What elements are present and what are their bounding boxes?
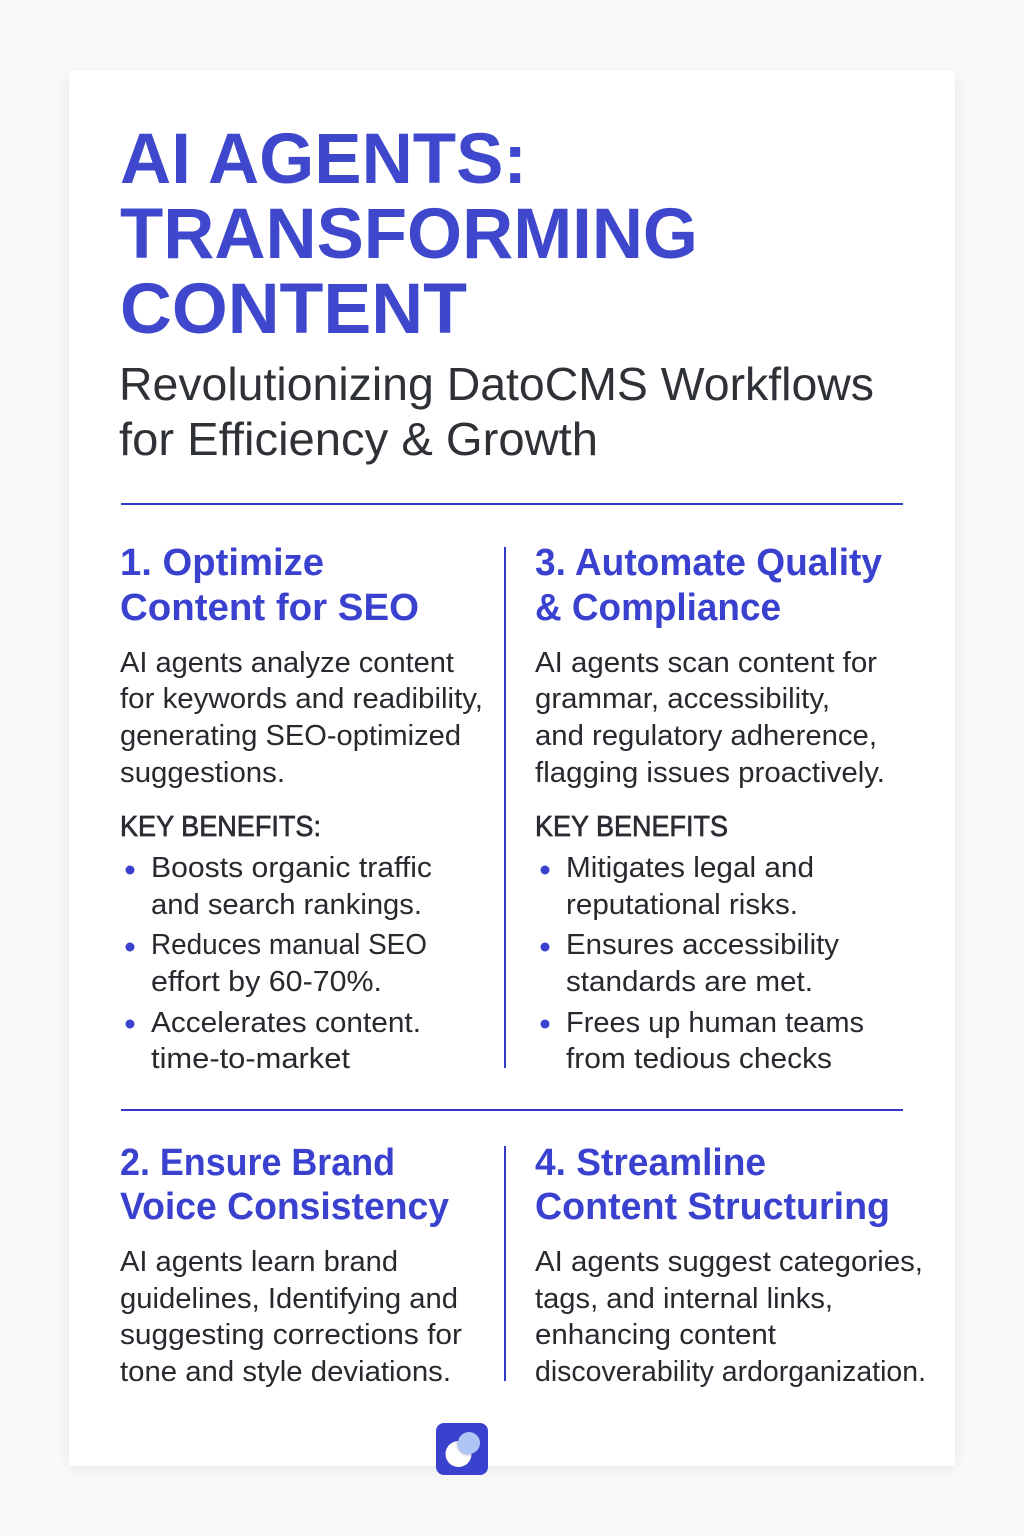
list: section 1 benefits (126, 852, 432, 1075)
text: section 1 description: suggestions. (120, 757, 285, 789)
title: TRANSFORMING (120, 195, 698, 274)
list: section 1 benefits: Boosts organic traffic (151, 852, 432, 884)
text: section 4 description: enhancing content (535, 1319, 776, 1351)
text: section 3 description (535, 647, 885, 789)
subtitle: for Efficiency & Growth (119, 413, 598, 465)
text: section 4 description: discoverability ardorganization. (535, 1356, 926, 1388)
list: section 3 benefits: from tedious checks (566, 1043, 832, 1075)
panel: section 2 (120, 1142, 462, 1388)
list: section 3 benefits: Mitigates legal and (566, 852, 814, 884)
heading: section 2: Voice Consistency (120, 1186, 449, 1228)
text: section 4 description (535, 1246, 926, 1388)
title: AI AGENTS: (120, 120, 527, 199)
text: section 1 description: AI agents analyze content (120, 647, 454, 679)
text: section 2 description: tone and style deviations. (120, 1356, 451, 1388)
list: section 3 benefits (540, 852, 864, 1075)
subtitle (119, 358, 874, 465)
text: section 3 description: AI agents scan content for (535, 647, 877, 679)
text: section 2 description (120, 1246, 462, 1388)
text: section 2 description: AI agents learn brand (120, 1246, 398, 1278)
subheading: key benefits: KEY BENEFITS (535, 811, 728, 843)
heading: section 1 (120, 542, 419, 629)
panel: section 3 (535, 542, 885, 1075)
text: section 1 description: for keywords and readibility, (120, 683, 483, 715)
text: section 3 description: grammar, accessibility, (535, 683, 830, 715)
heading: section 3 (535, 542, 882, 629)
subtitle: Revolutionizing DatoCMS Workflows (119, 358, 874, 410)
text: section 3 description: and regulatory adherence, (535, 720, 877, 752)
list: section 1 benefits: Reduces manual SEO (151, 929, 427, 961)
heading: section 4: 4. Streamline (535, 1142, 766, 1184)
heading: section 2 (120, 1142, 449, 1228)
text: section 1 description: generating SEO-optimized (120, 720, 461, 752)
list: section 1 benefits: effort by 60-70%. (151, 966, 382, 998)
heading: section 2: 2. Ensure Brand (120, 1142, 395, 1184)
list: section 3 benefits: Frees up human teams (566, 1007, 864, 1039)
text: section 2 description: suggesting corrections for (120, 1319, 462, 1351)
heading: section 1: Content for SEO (120, 587, 419, 629)
panel: card (69, 70, 955, 1466)
panel: section 1 (120, 542, 483, 1075)
list: section 3 benefits: standards are met. (566, 966, 813, 998)
icon: logo (436, 1423, 488, 1475)
text: section 1 description (120, 647, 483, 789)
heading: section 1: 1. Optimize (120, 542, 324, 584)
text: section 2 description: guidelines, Identifying and (120, 1283, 458, 1315)
list: section 1 benefits: and search rankings. (151, 889, 422, 921)
list: section 1 benefits: time-to-market (151, 1043, 350, 1075)
text: section 4 description: tags, and internal links, (535, 1283, 833, 1315)
panel: section 4 (535, 1142, 926, 1388)
list: section 3 benefits: reputational risks. (566, 889, 798, 921)
title (120, 120, 698, 349)
title: CONTENT (120, 270, 467, 349)
text: section 3 description: flagging issues proactively. (535, 757, 885, 789)
list: section 1 benefits: Accelerates content. (151, 1007, 421, 1039)
text: section 4 description: AI agents suggest categories, (535, 1246, 923, 1278)
heading: section 3: 3. Automate Quality (535, 542, 882, 584)
heading: section 4: Content Structuring (535, 1186, 890, 1228)
heading: section 4 (535, 1142, 890, 1228)
heading: section 3: & Compliance (535, 587, 781, 629)
subheading: key benefits: KEY BENEFITS: (120, 811, 321, 843)
list: section 3 benefits: Ensures accessibility (566, 929, 840, 961)
